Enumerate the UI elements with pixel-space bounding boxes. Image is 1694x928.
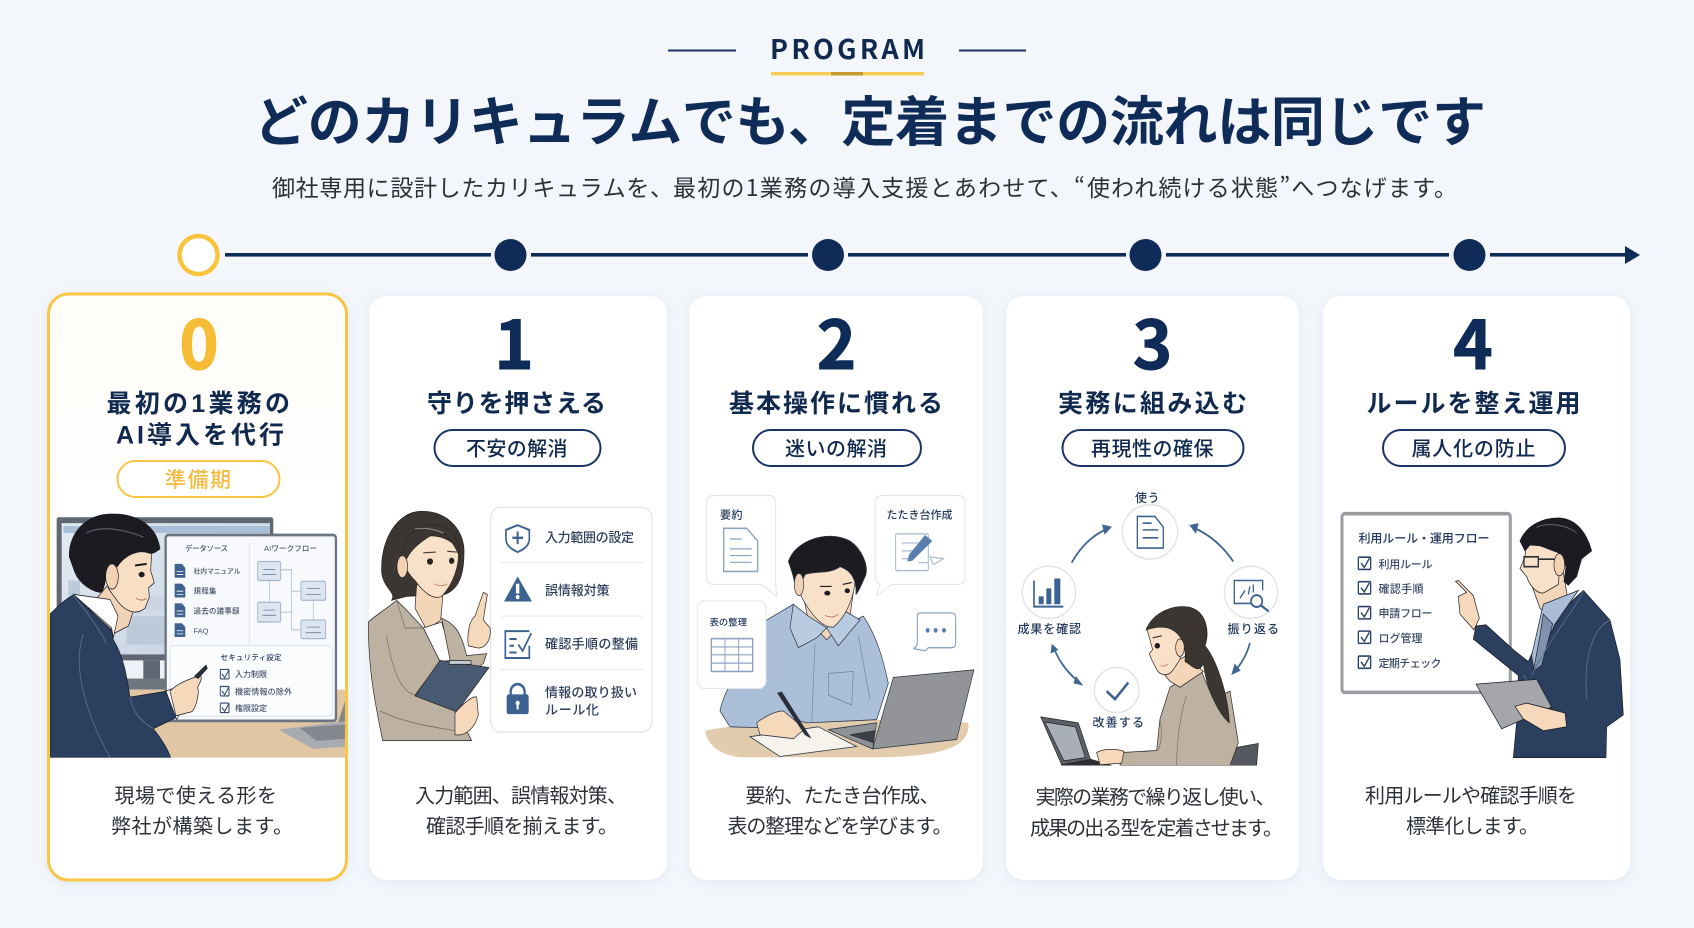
whiteboard title: 利用ルール・運用フロー [1358,532,1490,546]
title: どのカリキュラムでも、定着までの流れは同じです [254,93,1486,153]
man in navy suit [50,514,207,758]
icon: lock [507,684,529,714]
chat bubble icon [913,613,956,651]
bubble label: 要約: 要約 [720,508,742,522]
icon: shield [506,525,529,552]
timeline node 3 [1130,239,1162,271]
document icon lines [177,571,183,634]
security settings list: 機密情報の除外 [235,686,292,696]
workflow diagram [258,562,326,639]
bubble label: たたき台作成: たたき台作成 [886,508,952,522]
checklist items: 確認手順の整備 [545,636,638,652]
heading: AI導入を代行 [116,422,284,450]
heading: 守りを押さえる [427,390,606,418]
data source list: 社内マニュアル [194,566,241,576]
description [415,784,627,838]
pill: 属人化の防止: 属人化の防止 [1412,438,1536,460]
panel: step 0 [48,292,346,880]
checklist items: 入力範囲の設定 [545,530,634,545]
keyboard [130,696,132,697]
checklist items [545,530,638,718]
whiteboard [1342,514,1510,692]
cycle labels: 改善する [1092,714,1144,730]
whiteboard checklist labels: 定期チェック [1378,657,1442,670]
step number 4: 4 [1453,292,1493,389]
checklist items: 誤情報対策 [545,583,610,598]
whiteboard checklist labels [1378,558,1442,670]
checklist panel [491,507,652,732]
back monitor [50,517,273,691]
cycle labels [1018,490,1279,730]
heading [106,390,290,450]
heading: 実務に組み込む [1058,390,1247,418]
data source list: 過去の議事録 [194,606,240,616]
timeline node 1 [494,239,526,271]
whiteboard checklist labels: 申請フロー [1378,607,1432,620]
timeline [180,236,1640,274]
eyebrow: PROGRAM [668,28,1026,76]
cycle labels: 成果を確認 [1018,621,1081,636]
step number 2: 2 [817,292,856,389]
description: 要約、たたき台作成、 [746,784,940,808]
panel: step 3 [1006,292,1299,880]
data source list: FAQ [194,626,209,636]
timeline node 2 [812,239,844,271]
eyebrow: PROGRAM: PROGRAM [770,28,925,67]
cycle labels: 振り返る [1228,622,1279,636]
checklist items: ルール化 [545,702,599,718]
bubble: 要約 [707,495,777,596]
data source list [194,566,241,636]
screen label: データソース: データソース [185,543,228,553]
subtitle: 使われ続ける状態”へつなげます。 [1087,169,1457,203]
pill: 準備期 [118,461,280,497]
description: 利用ルールや確認手順を [1365,784,1577,808]
bubble label: 表の整理: 表の整理 [710,616,747,628]
desk [705,720,968,757]
description: 標準化します。 [1406,815,1539,838]
illustration: man configuring AI workflow [50,514,345,758]
whiteboard checklist labels: ログ管理 [1378,631,1422,645]
description: 成果の出る型を定着させます。 [1030,817,1283,840]
cycle node: review [1224,566,1278,618]
icon: warning triangle [504,577,532,601]
panel: step 2 [689,292,983,880]
heading: 基本操作に慣れる [729,390,943,418]
arrow heads [1051,523,1241,686]
heading: ルールを整え運用 [1366,390,1580,418]
whiteboard checklist labels: 確認手順 [1378,582,1424,596]
desk [129,690,345,758]
pill: 属人化の防止 [1383,430,1565,466]
timeline node 4 [1454,239,1486,271]
front monitor [166,535,336,721]
checklist items: 情報の取り扱い [545,685,637,700]
pill: 準備期: 準備期 [165,469,231,492]
pill: 再現性の確保: 再現性の確保 [1091,438,1214,460]
description [728,784,952,838]
illustration: woman with checklist panel [368,507,652,741]
cycle labels: 使う [1135,490,1160,505]
pill: 迷いの解消 [753,430,921,466]
security settings list: セキュリティ設定 [220,653,282,662]
description [111,784,293,838]
description: 確認手順を揃えます。 [426,815,618,838]
panel: step 1 [368,292,667,880]
step number 1: 1 [494,292,534,389]
man with glasses in navy suit [1456,518,1623,758]
heading: 最初の1業務の [106,390,290,418]
subtitle [272,169,1457,203]
step number 0: 0 [179,292,219,389]
pill: 迷いの解消: 迷いの解消 [785,438,887,460]
description [1365,784,1577,838]
description: 入力範囲、誤情報対策、 [415,784,627,808]
illustration: man presenting at whiteboard [1342,514,1623,758]
board checkboxes [1358,557,1371,668]
man in blue shirt [720,536,974,756]
subtitle: 御社専用に設計したカリキュラムを、 [272,169,673,203]
cycle node: use [1122,505,1178,559]
bubble: 表の整理 [697,601,766,688]
woman with ponytail at laptop [1041,607,1258,766]
data source list: 規程集 [194,586,217,596]
security settings list: 入力制限 [235,669,267,679]
description: 現場で使える形を [114,784,277,808]
document icons [175,564,185,637]
bubble: たたき台作成 [875,495,965,596]
timeline arrowhead [1625,246,1640,264]
pill: 不安の解消: 不安の解消 [466,438,568,460]
description: 弊社が構築します。 [111,815,293,838]
illustration: improvement cycle with woman [1022,505,1278,766]
pill: 不安の解消 [434,430,600,466]
illustration: man taking notes at laptop [697,495,974,757]
step number 3: 3 [1133,292,1172,389]
woman in beige jacket [368,511,490,741]
security settings list [220,653,292,713]
timeline start ring [180,236,218,274]
description: 実際の業務で繰り返し使い、 [1036,786,1276,809]
screen label: AIワークフロー: AIワークフロー [264,544,317,553]
checkboxes [220,669,229,713]
description: 表の整理などを学びます。 [728,815,952,838]
pill: 再現性の確保 [1062,430,1244,466]
icon: checklist [505,631,531,658]
laptop [278,701,345,749]
security settings list: 権限設定 [235,703,267,713]
panel: step 4 [1323,292,1630,880]
whiteboard checklist labels: 利用ルール [1378,558,1432,571]
subtitle: 最初の1業務の導入支援とあわせて、“ [673,169,1085,203]
cycle arrows [1054,528,1250,683]
description [1030,786,1283,840]
cycle node: check results [1022,566,1076,618]
cycle node: improve [1094,667,1139,713]
